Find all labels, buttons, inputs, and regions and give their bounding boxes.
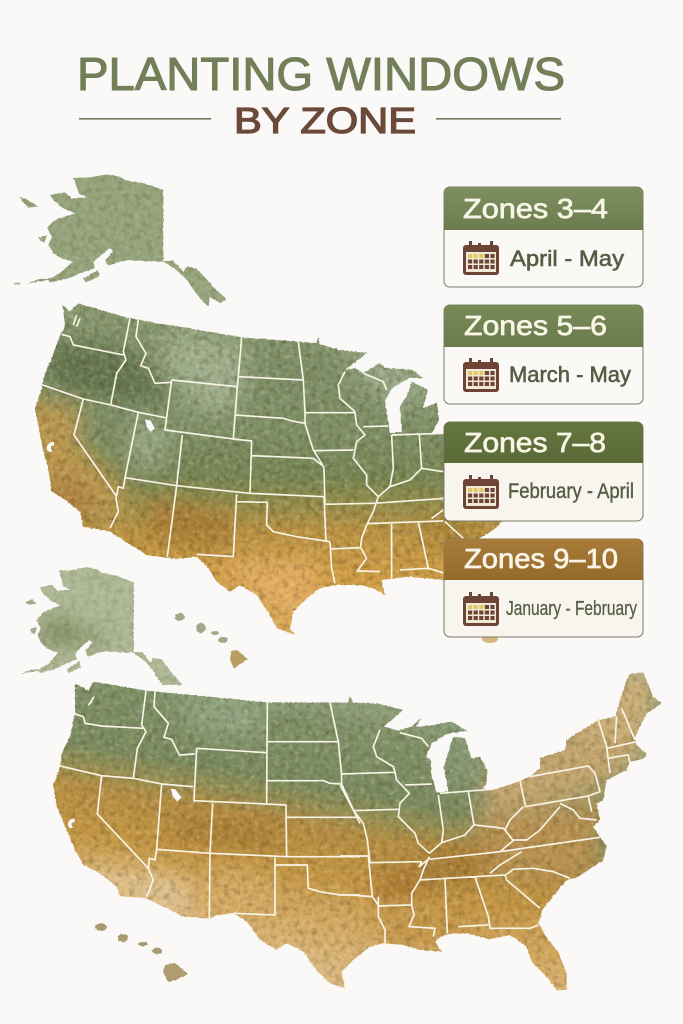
icon: calendar	[463, 358, 499, 392]
map: Alaska, upper	[12, 174, 226, 306]
heading: planting windows: PLANTING WINDOWS	[77, 48, 565, 100]
Great Salt Lake and San Francisco Bay, upper map	[47, 420, 154, 451]
icon: calendar	[463, 475, 499, 509]
zone label: Zones 9–10	[464, 543, 618, 574]
zone label: Zones 3–4	[463, 193, 608, 224]
title	[77, 48, 565, 141]
planting window text: March - May	[509, 362, 631, 387]
subheading: by zone: BY ZONE	[234, 100, 416, 141]
icon: calendar	[463, 592, 499, 626]
card: Zones 7-8	[444, 422, 643, 521]
icon: calendar	[463, 241, 499, 275]
Great Salt Lake and San Francisco Bay, lower map	[69, 789, 181, 827]
map: contiguous US, lower with zones 3-10 climate colouring	[52, 672, 662, 990]
zone label: Zones 7–8	[464, 427, 606, 458]
planting window text: January - February	[506, 598, 637, 620]
planting window text: April - May	[510, 246, 624, 271]
map: Florida tip showing under card	[482, 635, 498, 643]
map: Alaska, lower	[20, 567, 182, 686]
map: Hawaii, lower right of Alaska	[175, 613, 248, 669]
zone label: Zones 5–6	[464, 310, 607, 341]
map: contiguous US, upper with zones 3-8 climate colouring	[20, 295, 520, 640]
state borders, lower map west	[60, 691, 360, 918]
state borders, upper map	[43, 315, 463, 583]
map: Hawaii, bottom	[95, 924, 188, 982]
card: Zones 5-6	[444, 305, 643, 404]
planting window text: February - April	[508, 480, 634, 503]
card: Zones 3-4	[444, 187, 643, 287]
state borders, lower map east	[340, 708, 637, 943]
card: Zones 9-10	[444, 539, 643, 637]
